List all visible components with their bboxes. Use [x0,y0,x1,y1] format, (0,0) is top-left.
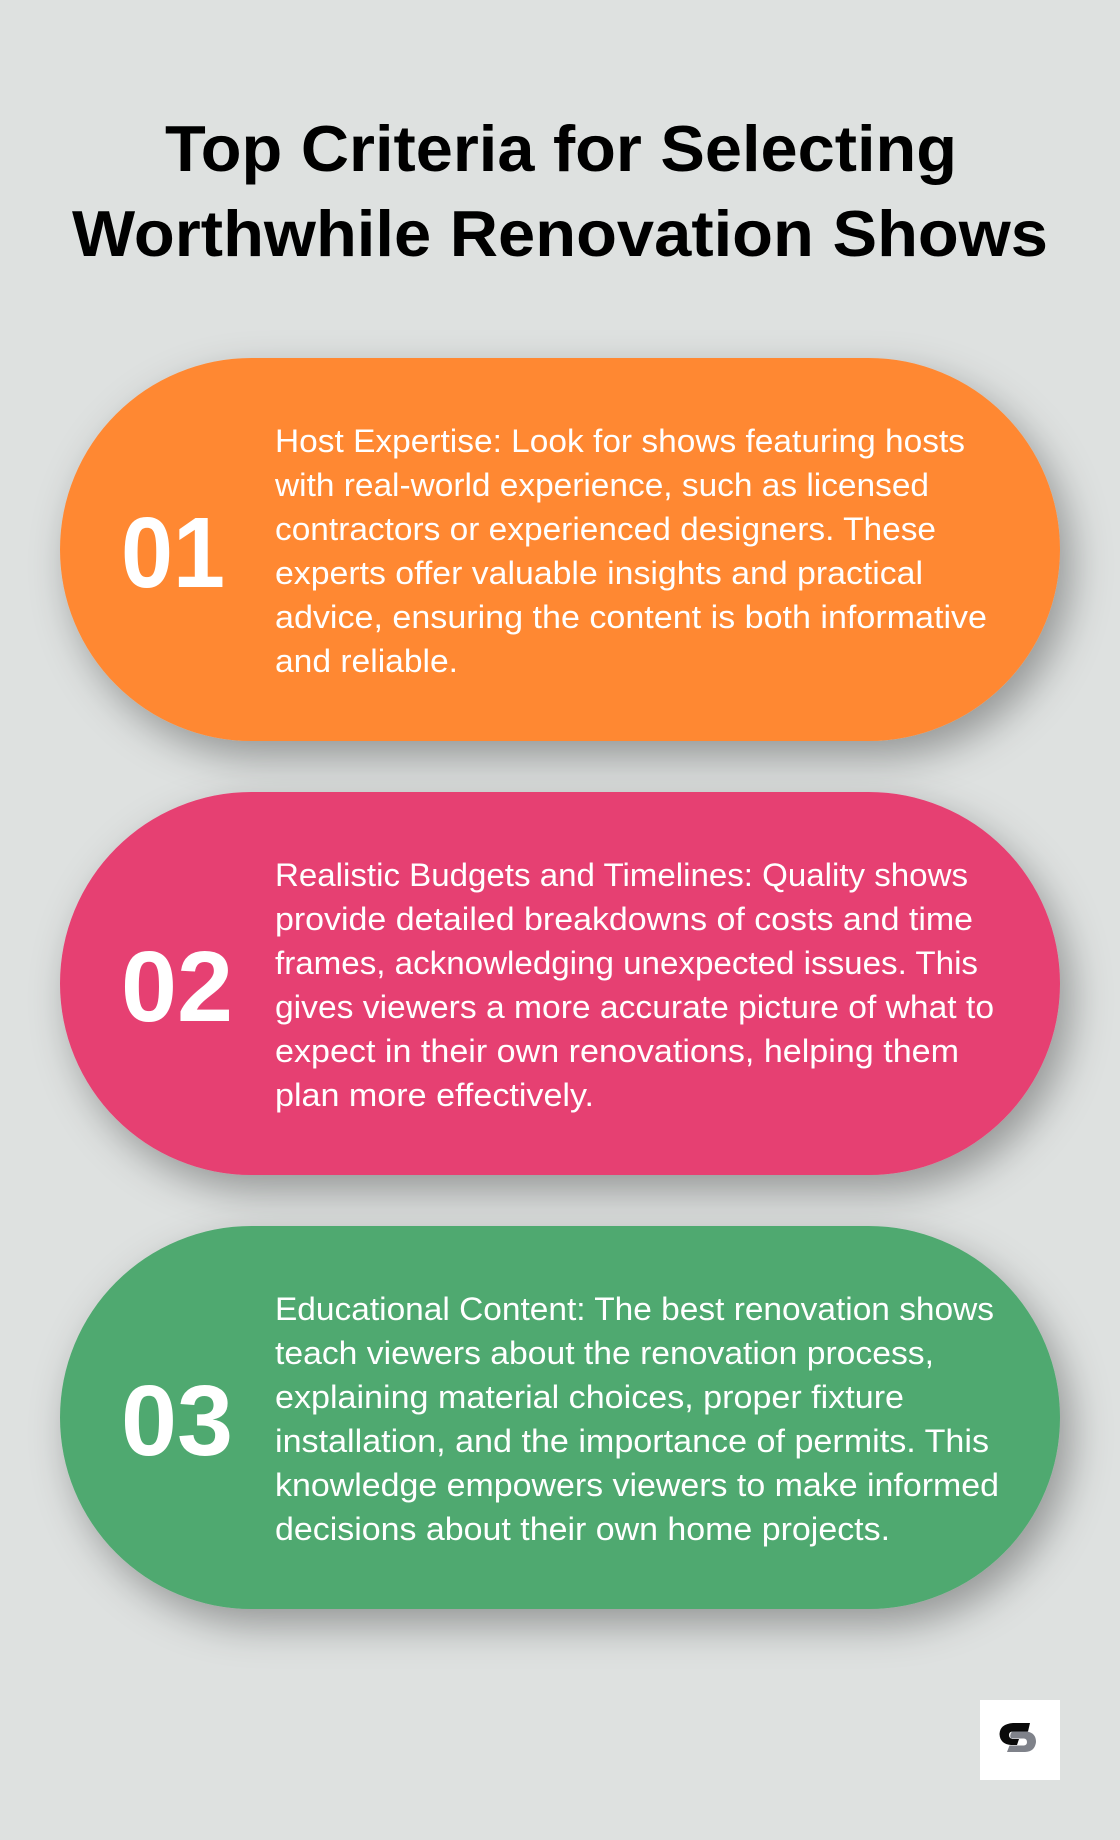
number 02: 02 [121,931,233,1043]
title: Top Criteria for Selecting [165,112,957,185]
panel: educational content [60,1226,1060,1609]
text block: realistic budgets: plan more effectively. [275,1077,594,1113]
number 01: 01 [121,497,225,609]
text block: educational content: Educational Content: The best renovation shows [275,1291,994,1327]
text block: realistic budgets: provide detailed breakdowns of costs and time [275,901,973,937]
text block: educational content: explaining material choices, proper fixture [275,1379,904,1415]
card background green [60,1226,1060,1609]
card background orange [60,358,1060,741]
text block: host expertise: contractors or experienced designers. These [275,511,936,547]
panel: realistic budgets and timelines [60,792,1060,1175]
text block: educational content: installation, and the importance of permits. This [275,1423,989,1459]
text block: educational content: teach viewers about the renovation process, [275,1335,934,1371]
text block: realistic budgets: expect in their own renovations, helping them [275,1033,959,1069]
text block: realistic budgets: gives viewers a more accurate picture of what to [275,989,994,1025]
text block: host expertise: advice, ensuring the content is both informative [275,599,987,635]
text block: host expertise: with real-world experience, such as licensed [274,467,929,503]
text block: host expertise: and reliable. [275,643,458,679]
text block: realistic budgets: Realistic Budgets and Timelines: Quality shows [275,857,968,893]
text block: host expertise: experts offer valuable insights and practical [275,555,923,591]
title: Worthwhile Renovation Shows [72,197,1048,270]
text block: host expertise: Host Expertise: Look for shows featuring hosts [275,423,965,459]
panel: host expertise [60,358,1060,741]
text block: educational content: decisions about their own home projects. [275,1511,890,1547]
title [72,112,1048,270]
text block: realistic budgets: frames, acknowledging unexpected issues. This [275,945,978,981]
number 03: 03 [121,1365,233,1477]
text block: educational content: knowledge empowers viewers to make informed [275,1467,999,1503]
text block: educational content [275,1291,999,1547]
text block: realistic budgets [275,857,994,1113]
text block: host expertise [274,423,987,679]
card background pink [60,792,1060,1175]
icon: logo [980,1700,1060,1780]
